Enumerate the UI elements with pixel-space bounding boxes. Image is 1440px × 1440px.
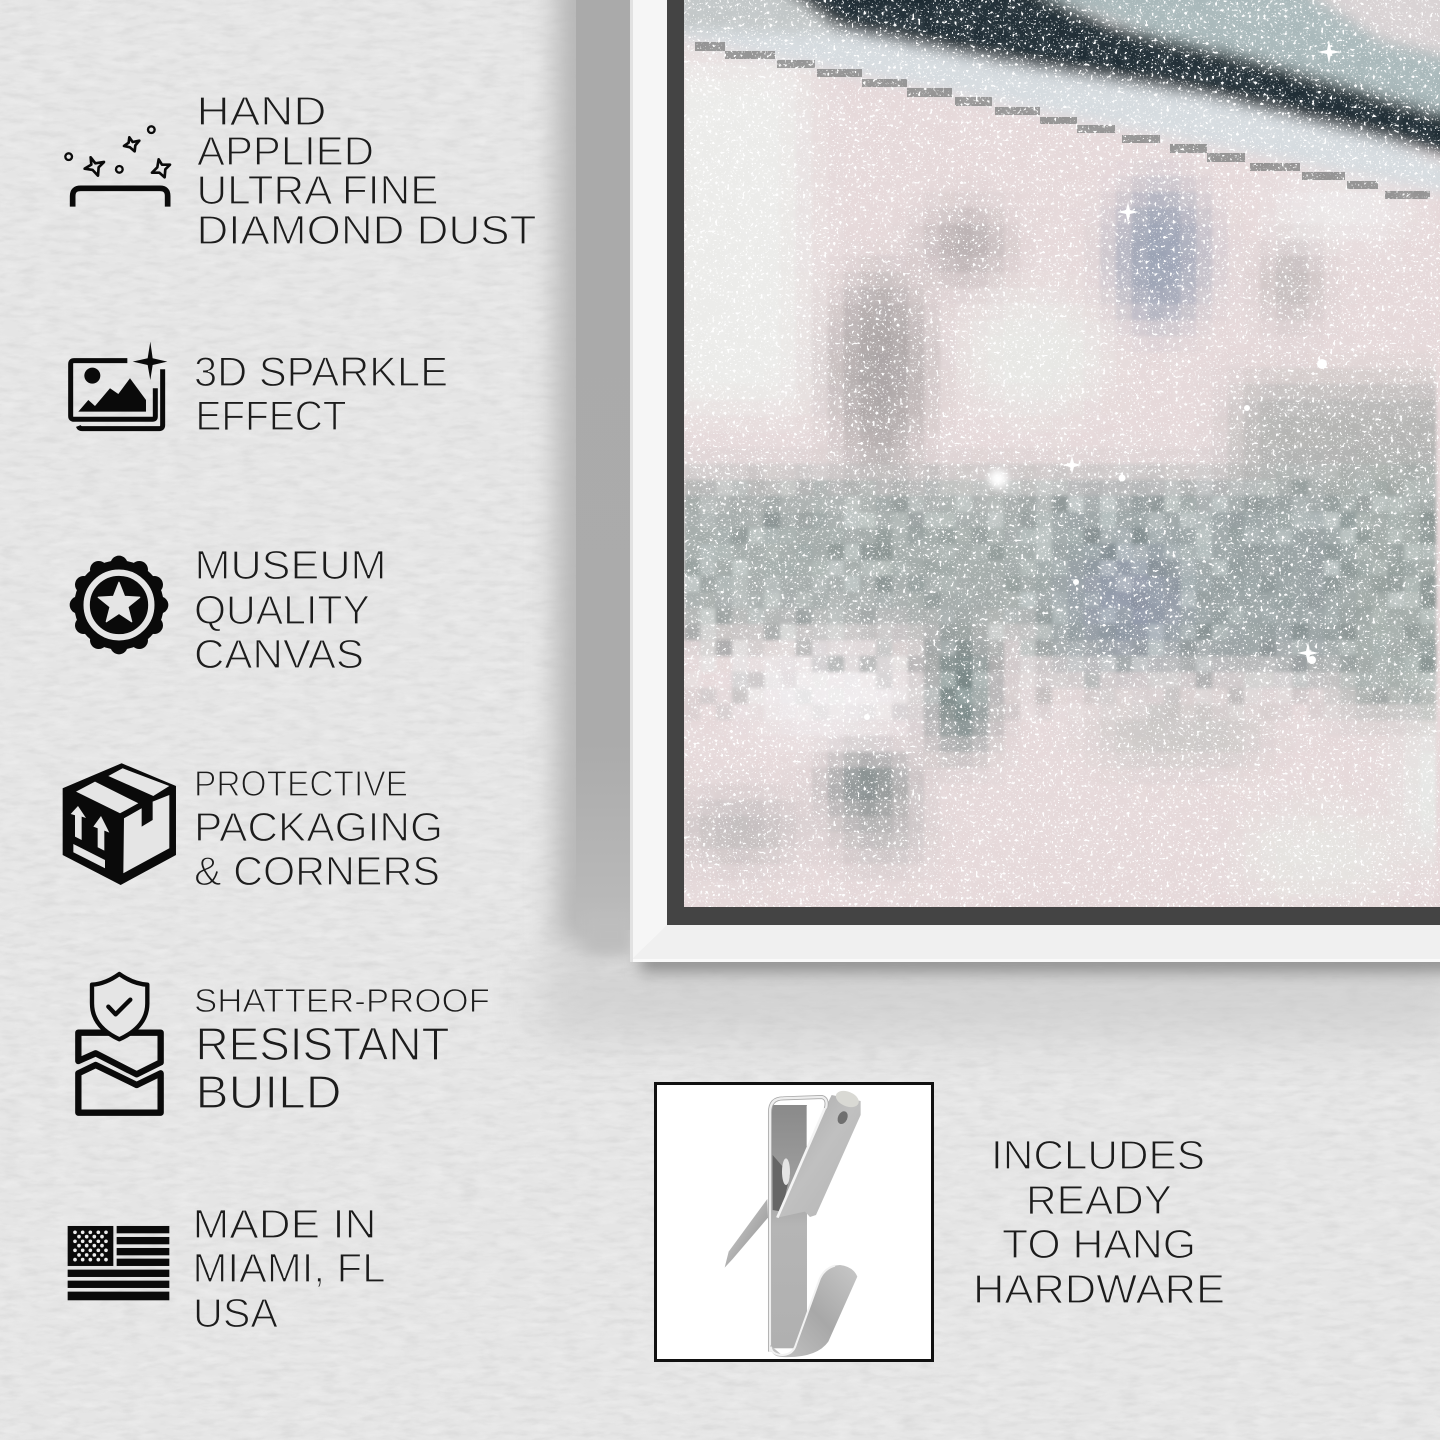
text: made in miami fl usa: MIAMI, FL [192, 1245, 386, 1291]
text: made in miami fl usa [192, 1201, 386, 1336]
text: hand applied ultra fine diamond dust [196, 88, 536, 253]
icon: quality badge star [70, 556, 168, 654]
text: includes ready to hang hardware: INCLUDES [991, 1132, 1205, 1178]
text: protective packaging and corners: & CORNERS [194, 848, 440, 894]
text: 3D sparkle effect [194, 348, 448, 439]
icon: packaged box [63, 763, 176, 885]
white frame [630, 0, 1440, 962]
text: protective packaging and corners [194, 763, 443, 894]
glitter specks [684, 0, 1440, 907]
text: includes ready to hang hardware: TO HANG [1002, 1221, 1196, 1267]
text: hand applied ultra fine diamond dust: DIAMOND DUST [196, 207, 536, 253]
framed canvas with shadow [540, 0, 1440, 1040]
text: protective packaging and corners: PROTECTIVE [194, 763, 408, 804]
star glints [864, 40, 1341, 720]
hook illustration [725, 1088, 861, 1357]
text: museum quality canvas: MUSEUM [194, 542, 386, 588]
text: museum quality canvas [194, 542, 386, 677]
text: shatter-proof resistant build: SHATTER-PROOF [194, 982, 490, 1019]
text: 3D sparkle effect: 3D SPARKLE [194, 348, 448, 395]
icon: 3D sparkle picture [71, 342, 167, 429]
text: museum quality canvas: QUALITY [194, 587, 370, 633]
text: hand applied ultra fine diamond dust: APPLIED [197, 128, 374, 174]
text: made in miami fl usa: USA [193, 1290, 279, 1336]
canvas painting [640, 0, 1440, 907]
dark diagonal band [676, 0, 1440, 196]
text: includes ready to hang hardware [973, 1132, 1225, 1312]
text: includes ready to hang hardware: HARDWARE [973, 1266, 1225, 1312]
stepped grey line [695, 42, 1430, 199]
icon: shield over cracked panel [78, 974, 161, 1113]
icon: diamond dust sprinkles [65, 126, 170, 207]
text: includes ready to hang hardware: READY [1026, 1177, 1172, 1223]
icon: american flag [68, 1226, 169, 1300]
text: hand applied ultra fine diamond dust: ULTRA FINE [196, 167, 438, 213]
text: shatter-proof resistant build: BUILD [196, 1066, 342, 1118]
dark inner liner [667, 0, 1440, 925]
text: museum quality canvas: CANVAS [194, 631, 364, 677]
text: shatter-proof resistant build: RESISTANT [196, 1018, 450, 1070]
text: protective packaging and corners: PACKAGING [194, 804, 443, 850]
text: hand applied ultra fine diamond dust: HAND [196, 88, 326, 134]
mosaic variation in the grey band [684, 460, 1440, 730]
panel: hanging hardware photo [656, 1084, 932, 1360]
text: made in miami fl usa: MADE IN [192, 1201, 376, 1247]
text: 3D sparkle effect: EFFECT [196, 392, 346, 439]
text: shatter-proof resistant build [194, 982, 490, 1118]
